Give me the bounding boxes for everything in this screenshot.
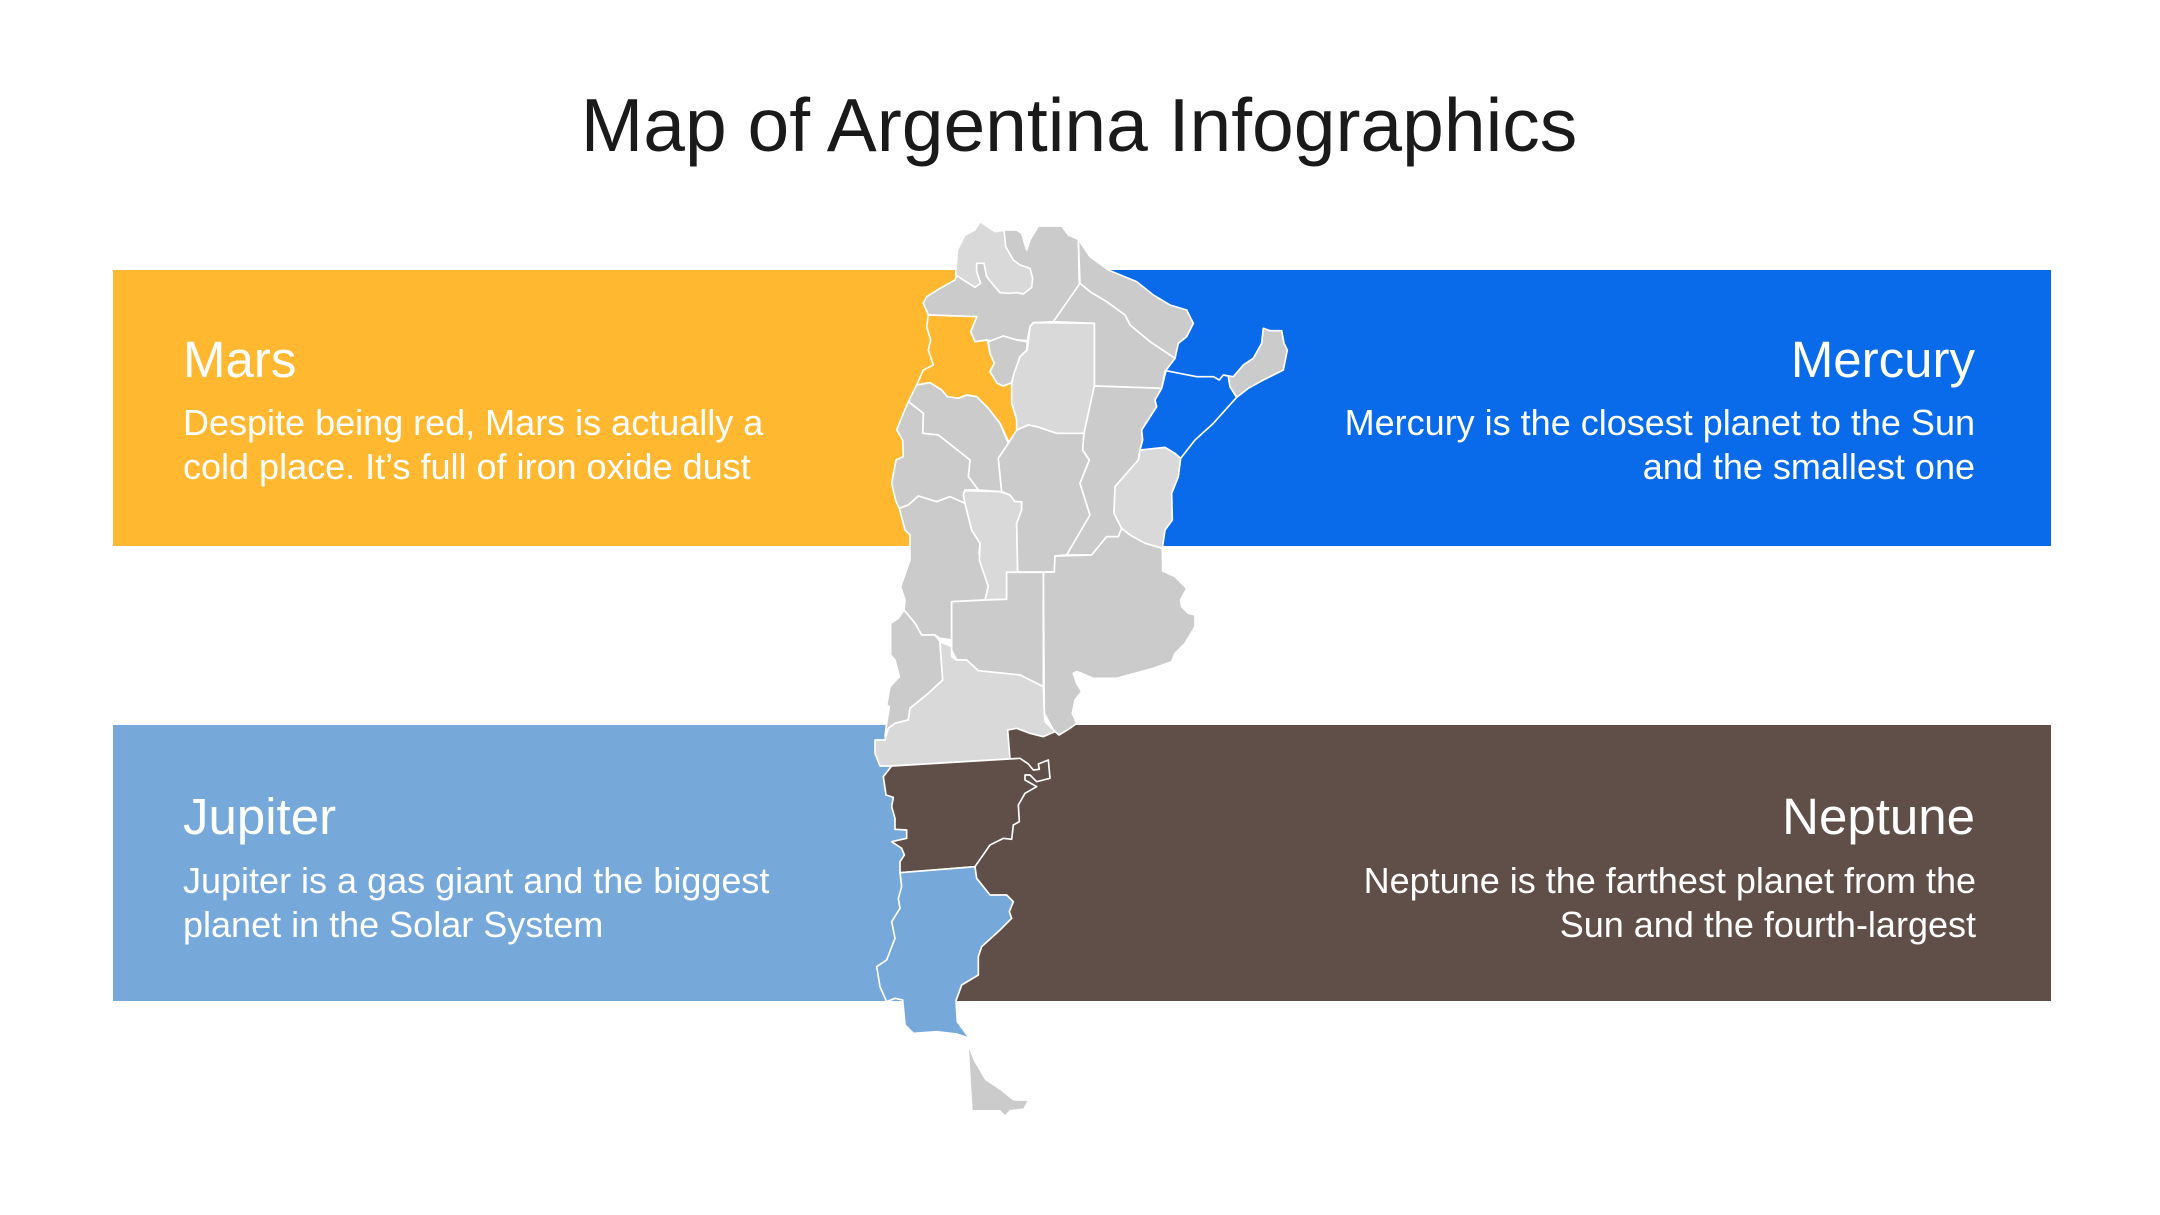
text: Mars description <box>183 402 764 486</box>
province: Salta <box>923 226 1079 342</box>
panel: Neptune <box>933 725 2051 1001</box>
heading: Jupiter: Jupiter <box>183 788 336 845</box>
province: Tierra del Fuego <box>969 1048 1027 1115</box>
panel: Jupiter <box>113 725 933 1001</box>
province: Rio Negro <box>875 642 1055 766</box>
province: Santa Cruz (highlighted) <box>877 867 1013 1038</box>
heading: Mars: Mars <box>183 331 296 388</box>
heading: Neptune: Neptune <box>1782 788 1975 845</box>
province: Jujuy <box>956 222 1033 294</box>
province: Formosa <box>1078 239 1193 358</box>
text: Mercury description: and the smallest one <box>1643 446 1975 486</box>
text: Neptune description <box>1364 860 1976 944</box>
text: Neptune description: Neptune is the farthest planet from the <box>1364 860 1976 901</box>
province: Santa Fe <box>1067 386 1162 555</box>
panel: Mercury <box>1100 270 2051 546</box>
province: Santiago del Estero <box>1012 323 1094 433</box>
province: La Rioja <box>908 383 1008 492</box>
province: Neuquen <box>885 610 943 737</box>
title: Map of Argentina Infographics <box>581 83 1577 167</box>
province: Misiones <box>1228 328 1287 397</box>
text: Mercury description: Mercury is the closest planet to the Sun <box>1345 402 1975 443</box>
text: Mars description: Despite being red, Mars is actually a <box>183 402 763 443</box>
province: Entre Rios <box>1114 447 1181 548</box>
province: Mendoza <box>899 496 988 640</box>
province: Cordoba <box>998 425 1090 572</box>
text: Mars description: cold place. It’s full of iron oxide dust <box>183 446 751 486</box>
province: San Juan <box>892 402 978 508</box>
province: Chubut (highlighted) <box>883 758 1050 873</box>
province: Chaco <box>1053 283 1175 388</box>
panel: Mars <box>113 270 973 546</box>
province: Corrientes (highlighted) <box>1140 371 1237 458</box>
text: Mercury description <box>1345 402 1975 486</box>
heading: Mercury: Mercury <box>1791 331 1975 388</box>
text: Jupiter description: planet in the Solar System <box>183 904 603 944</box>
province: Catamarca (highlighted) <box>917 315 1017 443</box>
text: Jupiter description: Jupiter is a gas giant and the biggest <box>183 860 769 901</box>
text: Neptune description: Sun and the fourth-largest <box>1560 904 1976 944</box>
text: Jupiter description <box>183 860 770 944</box>
province: La Pampa <box>952 572 1043 687</box>
province: San Luis <box>963 491 1022 600</box>
province: Tucuman <box>988 336 1027 386</box>
province: Buenos Aires <box>1043 528 1195 735</box>
